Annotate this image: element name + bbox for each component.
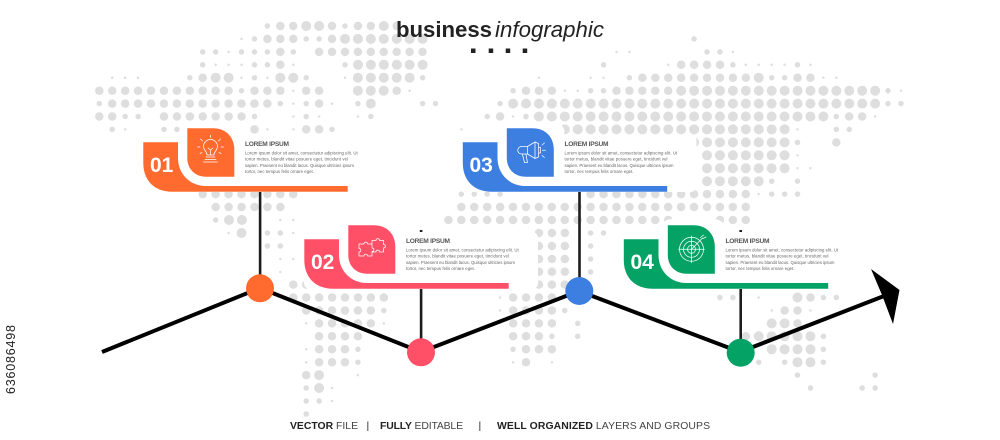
stem: step 4 bbox=[739, 230, 742, 352]
body text: sapien. Praesent eu blandit lacus. Quisque ultricies ipsum bbox=[564, 163, 674, 168]
node: step 2 bbox=[407, 338, 435, 366]
title: infographic bbox=[495, 17, 604, 42]
stem: step 1 bbox=[259, 186, 261, 288]
icon tile bbox=[668, 225, 715, 274]
body text: sapien. Praesent eu blandit lacus. Quisque ultricies ipsum bbox=[726, 260, 835, 265]
heading: LOREM IPSUM bbox=[245, 141, 290, 148]
title dots bbox=[471, 48, 527, 53]
band and number tab bbox=[463, 142, 667, 192]
icon tile bbox=[507, 128, 554, 177]
number: 04 bbox=[630, 251, 654, 274]
stock id: 636086498 bbox=[4, 325, 18, 394]
number: 03 bbox=[470, 154, 493, 177]
icon: light bulb bbox=[198, 135, 224, 162]
heading: LOREM IPSUM bbox=[726, 238, 770, 245]
footer caption: FULLY EDITABLE bbox=[380, 421, 463, 432]
body text: Lorem ipsum dolor sit amet, consectetur adipiscing elit. Ut bbox=[564, 150, 678, 155]
body text: tortor metus, blandit vitae posuere eget, tincidunt vel bbox=[406, 254, 509, 258]
heading: LOREM IPSUM bbox=[564, 141, 609, 148]
body text: tortor metus, blandit vitae posuere eget, tincidunt vel bbox=[564, 156, 668, 162]
node: step 1 bbox=[246, 274, 274, 302]
dotted world map background bbox=[99, 26, 902, 414]
body text: tortor metus, blandit vitae posuere eget, tincidunt vel bbox=[726, 254, 829, 258]
heading: LOREM IPSUM bbox=[406, 238, 450, 245]
arrow head bbox=[871, 269, 900, 324]
panel: step 4 bbox=[624, 219, 858, 289]
band and number tab bbox=[304, 239, 509, 289]
stem: step 2 bbox=[420, 230, 422, 352]
footer caption bbox=[290, 421, 710, 432]
panel: step 1 bbox=[143, 122, 377, 192]
icon: target bbox=[678, 235, 706, 262]
icon: puzzle bbox=[359, 239, 385, 256]
node: step 4 bbox=[727, 339, 755, 367]
icon tile bbox=[348, 225, 395, 274]
band and number tab bbox=[624, 239, 828, 289]
number: 02 bbox=[311, 251, 334, 274]
body text: Lorem ipsum dolor sit amet, consectetur adipiscing elit. Ut bbox=[245, 150, 358, 155]
panel: step 2 bbox=[304, 219, 538, 289]
timeline connector line bbox=[102, 288, 884, 352]
panel: step 3 bbox=[462, 122, 696, 192]
icon: megaphone bbox=[518, 142, 546, 162]
footer caption: | bbox=[366, 421, 369, 432]
body text: tortor, nec tempus felis ornare eget. bbox=[726, 266, 794, 271]
body text: tortor, nec tempus felis ornare eget. bbox=[564, 169, 634, 174]
body text: Lorem ipsum dolor sit amet, consectetur adipiscing elit. Ut bbox=[406, 247, 519, 252]
body text: sapien. Praesent eu blandit lacus. Quisque ultricies ipsum bbox=[245, 163, 354, 168]
body text: tortor, nec tempus felis ornare eget. bbox=[406, 266, 475, 271]
body text: sapien. Praesent eu blandit lacus. Quisque ultricies ipsum bbox=[406, 260, 515, 265]
footer caption: | bbox=[478, 421, 481, 432]
icon tile bbox=[187, 128, 234, 177]
body text: tortor, nec tempus felis ornare eget. bbox=[245, 169, 314, 174]
footer caption: WELL ORGANIZED LAYERS AND GROUPS bbox=[497, 421, 710, 432]
footer caption: VECTOR FILE bbox=[290, 421, 358, 432]
number: 01 bbox=[150, 154, 174, 177]
stem: step 3 bbox=[578, 186, 581, 291]
title: business bbox=[396, 17, 492, 42]
band and number tab bbox=[143, 142, 348, 192]
body text: Lorem ipsum dolor sit amet, consectetur adipiscing elit. Ut bbox=[726, 247, 839, 252]
body text: tortor metus, blandit vitae posuere eget, tincidunt vel bbox=[245, 156, 348, 162]
node: step 3 bbox=[565, 277, 593, 305]
